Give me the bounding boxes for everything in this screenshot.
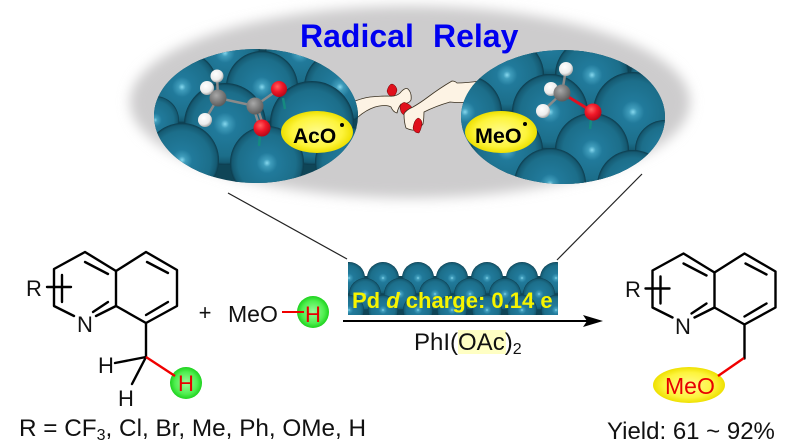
substituent list: , Cl, Br, Me, Ph, OMe, H: [106, 415, 366, 442]
arrow: reaction: [343, 315, 603, 327]
label: MeO radical: MeO: [475, 124, 522, 148]
title: [300, 18, 519, 54]
reactant: methanol: [228, 296, 329, 328]
highlighted C-H bond: [146, 357, 202, 399]
reagent: PhI(OAc)2: 2: [513, 341, 522, 358]
reactant: methanol: H: [305, 302, 321, 327]
plus sign: +: [199, 300, 211, 325]
label: Pd d charge: Pd d charge: 0.14 e: [352, 288, 553, 313]
molecule: methoxy: [536, 62, 602, 129]
highlighted methoxy group: [653, 358, 744, 403]
panel: Pd surface slab: [348, 262, 558, 315]
highlighted methoxy group: MeO: [665, 373, 715, 399]
title: Relay: [433, 18, 519, 54]
icon: holding hands: [350, 81, 480, 133]
grey background ellipse: [130, 6, 690, 198]
reactant: substituted 8-methylquinoline: N: [77, 312, 93, 337]
product: methoxymethyl quinoline: R: [625, 277, 641, 302]
panel: AcO radical on Pd surface: [154, 49, 358, 183]
panel: MeO radical on Pd surface: [461, 50, 665, 184]
reactant: substituted 8-methylquinoline: [26, 252, 202, 411]
reactant: substituted 8-methylquinoline: H: [118, 386, 134, 411]
highlighted C-H bond: H: [178, 371, 194, 396]
product: methoxymethyl quinoline: [625, 254, 776, 403]
connector lines from surface to zoomed views: [228, 174, 642, 260]
label: AcO radical: [281, 111, 353, 153]
title: Radical: [300, 18, 414, 54]
reactant: methanol: MeO: [228, 301, 278, 327]
reactant: substituted 8-methylquinoline: H: [98, 353, 114, 378]
reagent: PhI(OAc)2: PhI(OAc): [414, 329, 513, 356]
molecule: acetate: [198, 70, 287, 146]
reactant: substituted 8-methylquinoline: R: [26, 276, 42, 301]
label: AcO radical: AcO: [293, 125, 336, 148]
product: methoxymethyl quinoline: N: [675, 314, 691, 339]
label: MeO radical: [465, 111, 537, 153]
substituent list: R = CF: [19, 415, 97, 442]
